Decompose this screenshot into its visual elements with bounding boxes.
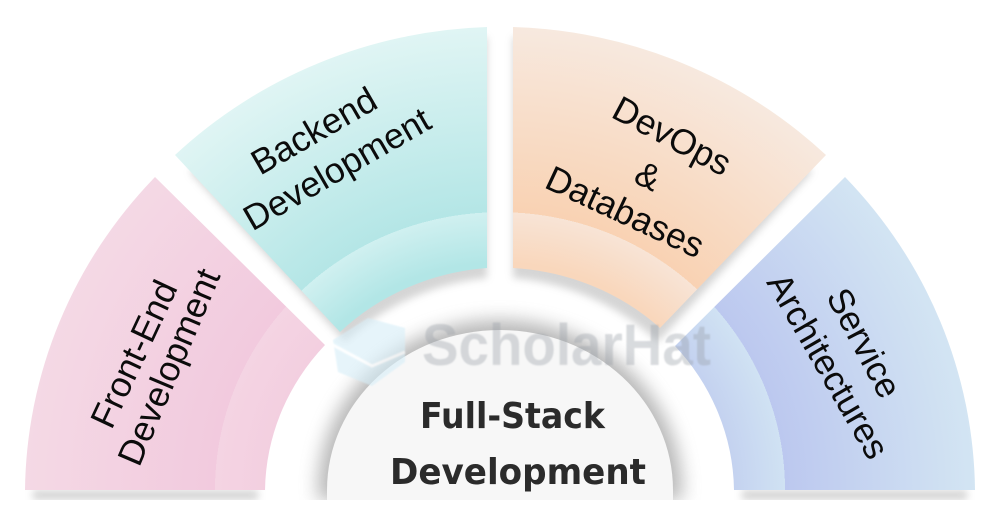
label: DevOps & Databases [540, 88, 738, 266]
panel: Service Architectures [675, 177, 975, 490]
icon: stacked hexagon logo [333, 318, 405, 386]
label: Front-End Development: Development [110, 263, 228, 471]
label: Backend Development: Development [236, 99, 438, 239]
panel: center hub [318, 320, 682, 500]
label: DevOps & Databases: & [629, 153, 668, 199]
label: DevOps & Databases: Databases [540, 158, 710, 266]
label: DevOps & Databases: DevOps [606, 88, 738, 184]
watermark: ScholarHat logo [333, 313, 711, 386]
panel: Backend Development [175, 27, 487, 332]
heading: Full-Stack Development: Full-Stack [420, 396, 606, 437]
heading: Full-Stack Development [390, 396, 646, 493]
label: Service Architectures: Architectures [759, 266, 897, 466]
panel: DevOps and Databases [513, 27, 826, 328]
label: Front-End Development: Front-End [83, 274, 185, 434]
watermark text: ScholarHat [422, 313, 711, 378]
heading: Full-Stack Development: Development [390, 452, 646, 493]
panel: Front-End Development [25, 177, 325, 490]
label: Service Architectures: Service [819, 281, 909, 405]
label: Backend Development: Backend [244, 79, 384, 183]
